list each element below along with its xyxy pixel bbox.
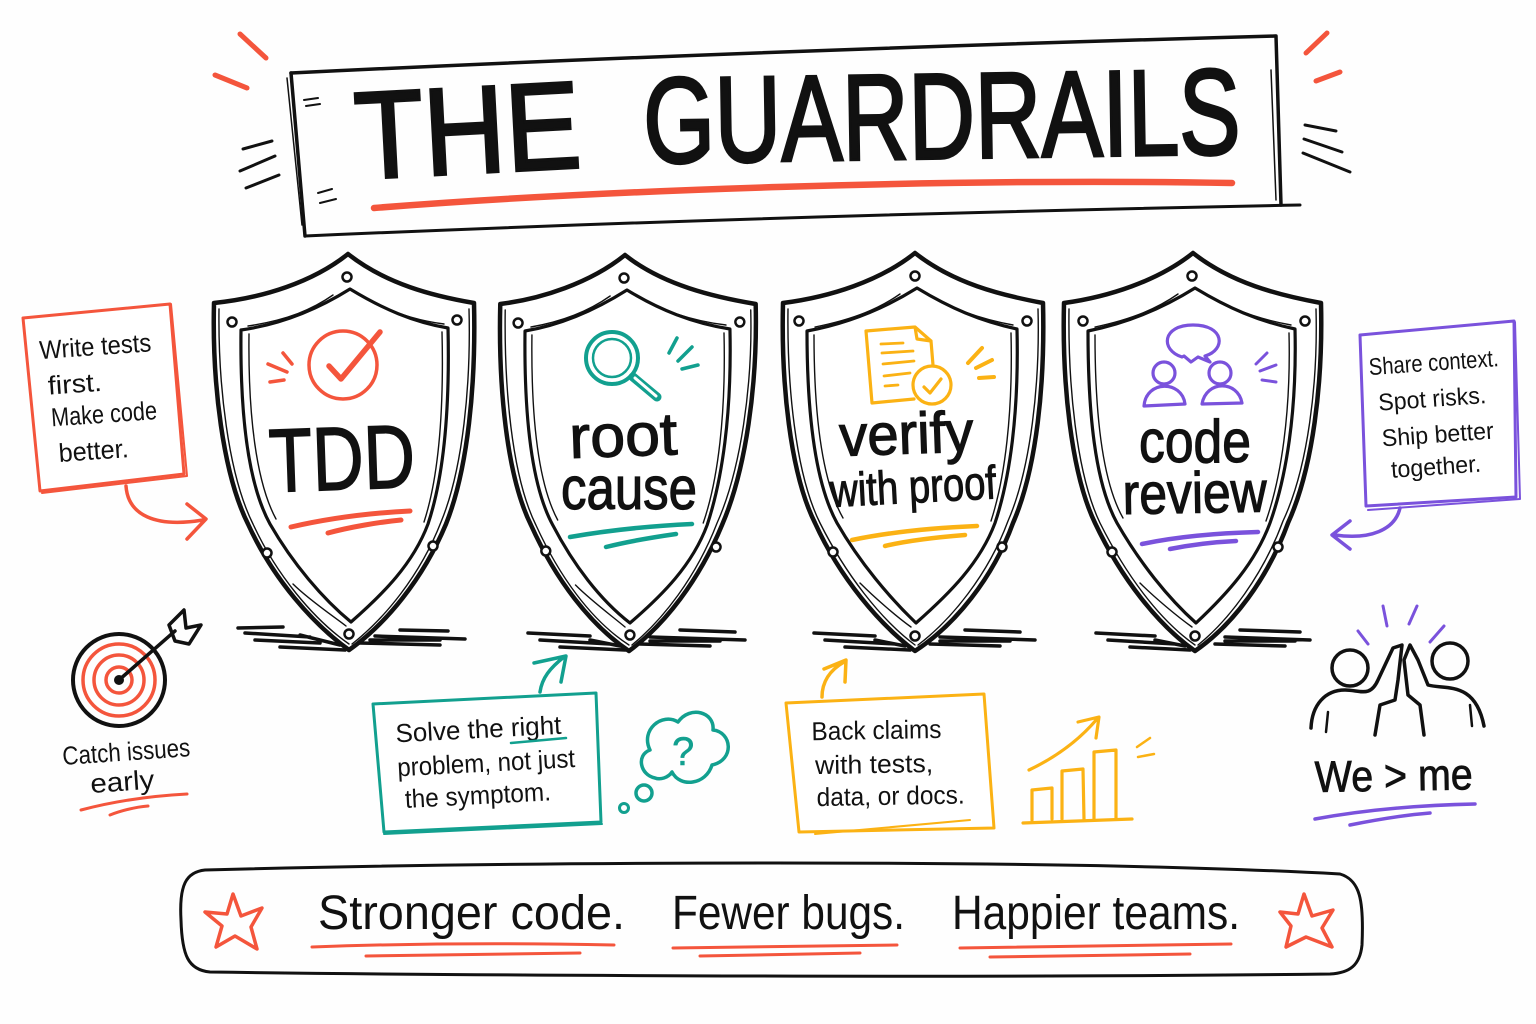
caption: we > me: We > me [1314,750,1473,802]
underline [1142,532,1258,549]
shield outline [1064,253,1321,651]
slogan: stronger code: Stronger code. [318,887,625,940]
arrow to code review shield [1332,508,1400,549]
banner frame [287,36,1300,236]
note frame [373,693,602,834]
underline [81,794,187,815]
arrow to TDD shield [126,486,206,539]
icon: high five [1311,606,1484,735]
note: share context [1332,321,1520,549]
caption: we > me [1314,750,1475,825]
shield outline [783,253,1043,651]
shield ground shadow [1096,630,1310,650]
shield: TDD [214,254,474,650]
shield: root cause [500,255,756,651]
label: code: code [1139,408,1251,475]
icon: target with arrow [73,610,201,726]
banner: slogan [181,863,1362,976]
note text: better. [58,433,129,468]
title banner [287,36,1300,236]
note text: Spot risks. [1377,382,1487,417]
icon: star left [205,894,262,949]
note text: first. [47,367,103,401]
icon: rising bar chart [1023,717,1154,823]
icon: check circle [268,331,380,399]
icon: magnifier [586,332,698,397]
underline [291,511,410,533]
note text: together. [1390,451,1482,484]
note frame [786,694,994,834]
shield ground shadow [238,627,465,650]
slogan: happier teams: Happier teams. [952,887,1240,940]
label: cause: cause [561,455,697,522]
underline [852,526,977,546]
icon: thought cloud with question mark: ? [672,730,694,774]
note: write tests first [23,304,206,539]
note: solve the right problem [373,656,602,834]
shield ground shadow [814,630,1035,650]
note text [1368,345,1507,485]
slogan underlines [312,944,1231,957]
note text: Write tests [38,327,152,365]
underline [1315,804,1475,825]
icon: star right [1280,894,1333,947]
note frame [23,304,187,493]
note text: Solve the right [395,710,563,748]
caption: catch issues early: early [89,765,156,799]
note text: Make code [50,395,158,432]
note text: the symptom. [404,776,552,814]
icon: thought cloud with question mark [620,712,728,812]
decorative sparks around title [215,33,1350,188]
arrow to verify shield [822,660,846,697]
icon: document check [866,327,994,404]
note text [811,714,965,812]
label: with proof: with proof [828,455,998,517]
underline [570,524,692,547]
note text: Share context. [1368,345,1500,381]
note text [38,327,160,469]
caption: catch issues early: Catch issues [61,732,191,771]
icon: people and speech bubble [1144,325,1276,406]
label: verify: verify [838,399,974,469]
slogan: fewer bugs: Fewer bugs. [672,887,905,940]
note: back claims [786,660,994,834]
shield outline [214,254,474,650]
note text: with tests, [814,748,933,780]
note text: Back claims [811,714,942,746]
label: review: review [1122,459,1268,527]
label: root: root [568,400,679,471]
label: TDD: TDD [267,407,417,512]
note text: Ship better [1381,418,1495,452]
shield ground shadow [528,630,745,650]
shield outline [500,255,756,651]
note frame [1360,321,1520,510]
banner frame [181,863,1362,976]
highlight under right [511,738,566,743]
note text: problem, not just [396,743,577,782]
shield: code review [1064,253,1321,651]
note text [395,709,578,814]
title banner: GUARDRAILS [642,44,1241,189]
arrow to root cause shield [534,656,566,692]
title underline [374,182,1232,208]
note text: data, or docs. [816,780,965,812]
shield: verify with proof [783,253,1043,651]
caption: catch issues early [61,732,191,815]
title text: THE [351,56,584,206]
